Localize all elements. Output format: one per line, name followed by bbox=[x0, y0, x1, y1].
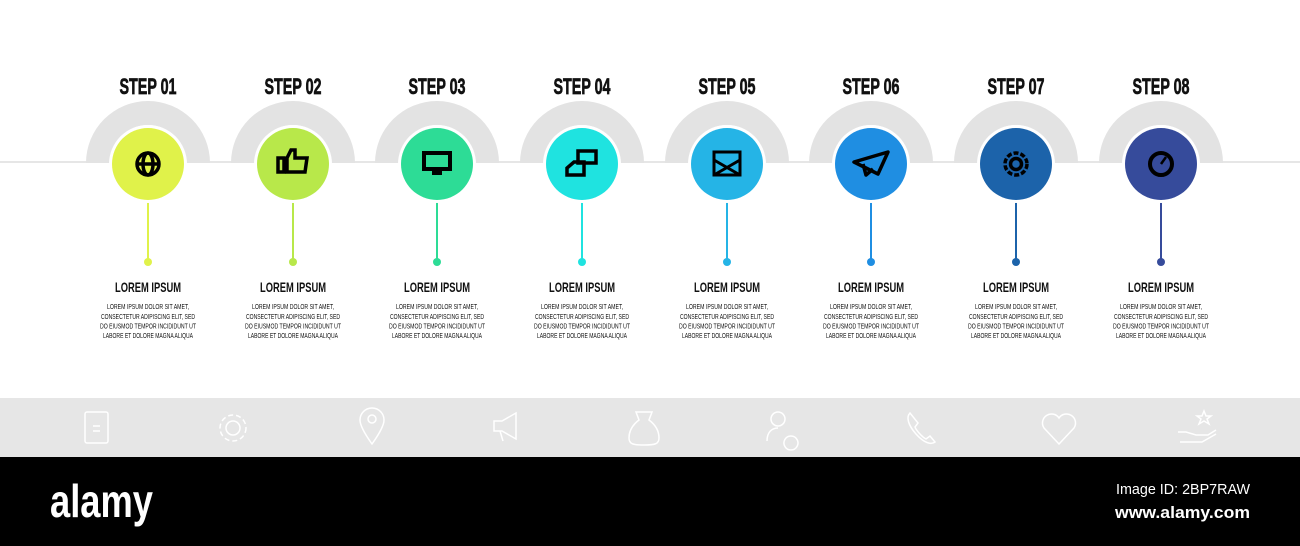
step 1 text: CONSECTETUR ADIPISCING ELIT, SED bbox=[101, 314, 195, 321]
step 3: CONSECTETUR ADIPISCING ELIT, SED bbox=[390, 314, 484, 321]
step 8: STEP 08 bbox=[1132, 74, 1190, 99]
step 8: LOREM IPSUM DOLOR SIT AMET, bbox=[1120, 304, 1202, 311]
icon: chat user bbox=[567, 151, 596, 175]
step 2: DO EIUSMOD TEMPOR INCIDIDUNT UT bbox=[245, 324, 342, 330]
step 2: LOREM IPSUM bbox=[260, 279, 326, 295]
step 7 bbox=[954, 74, 1078, 340]
step 5: STEP 05 bbox=[698, 74, 756, 99]
step 8: LABORE ET DOLORE MAGNA ALIQUA bbox=[1116, 333, 1206, 340]
step 5: LABORE ET DOLORE MAGNA ALIQUA bbox=[682, 333, 772, 340]
step 6 bbox=[809, 74, 933, 340]
logo: alamy bbox=[50, 475, 153, 527]
icon: gear bbox=[1005, 153, 1027, 175]
step 1 text: LOREM IPSUM DOLOR SIT AMET, bbox=[107, 304, 189, 311]
step 1 bbox=[86, 74, 210, 340]
step 6: LABORE ET DOLORE MAGNA ALIQUA bbox=[826, 333, 916, 340]
step 1 text bbox=[100, 279, 197, 340]
step 5: CONSECTETUR ADIPISCING ELIT, SED bbox=[680, 314, 774, 321]
step 1 heading: STEP 01 bbox=[120, 74, 176, 99]
step 4: STEP 04 bbox=[554, 74, 611, 99]
step 7: LOREM IPSUM DOLOR SIT AMET, bbox=[975, 304, 1057, 311]
step 3: LABORE ET DOLORE MAGNA ALIQUA bbox=[392, 333, 482, 340]
step 5: DO EIUSMOD TEMPOR INCIDIDUNT UT bbox=[679, 324, 776, 330]
footer bar bbox=[0, 457, 1300, 546]
step 5 bbox=[665, 74, 789, 340]
step 2: STEP 02 bbox=[264, 74, 322, 99]
step 2 bbox=[231, 74, 355, 340]
step 7: DO EIUSMOD TEMPOR INCIDIDUNT UT bbox=[968, 324, 1065, 330]
step 3: LOREM IPSUM bbox=[404, 279, 470, 295]
step 6: DO EIUSMOD TEMPOR INCIDIDUNT UT bbox=[823, 324, 920, 330]
step 1 text: LOREM IPSUM bbox=[115, 279, 181, 295]
step 8 bbox=[1099, 74, 1223, 340]
step 5: LOREM IPSUM DOLOR SIT AMET, bbox=[686, 304, 768, 311]
step 3: DO EIUSMOD TEMPOR INCIDIDUNT UT bbox=[389, 324, 486, 330]
step 8: LOREM IPSUM bbox=[1128, 279, 1194, 295]
step 4: LABORE ET DOLORE MAGNA ALIQUA bbox=[537, 333, 627, 340]
step 4 bbox=[520, 74, 644, 340]
step 7: LABORE ET DOLORE MAGNA ALIQUA bbox=[971, 333, 1061, 340]
step 3 bbox=[375, 74, 499, 340]
step 8: CONSECTETUR ADIPISCING ELIT, SED bbox=[1114, 314, 1208, 321]
step 6: LOREM IPSUM DOLOR SIT AMET, bbox=[830, 304, 912, 311]
step 7: LOREM IPSUM bbox=[983, 279, 1049, 295]
step 6: LOREM IPSUM bbox=[838, 279, 904, 295]
icon: globe bbox=[137, 153, 159, 175]
step 2: CONSECTETUR ADIPISCING ELIT, SED bbox=[246, 314, 340, 321]
step 3: LOREM IPSUM DOLOR SIT AMET, bbox=[396, 304, 478, 311]
step 2: LABORE ET DOLORE MAGNA ALIQUA bbox=[248, 333, 338, 340]
step 1 text: LABORE ET DOLORE MAGNA ALIQUA bbox=[103, 333, 193, 340]
step 7: CONSECTETUR ADIPISCING ELIT, SED bbox=[969, 314, 1063, 321]
step 2: LOREM IPSUM DOLOR SIT AMET, bbox=[252, 304, 334, 311]
step 6: CONSECTETUR ADIPISCING ELIT, SED bbox=[824, 314, 918, 321]
url: www.alamy.com bbox=[1114, 503, 1250, 522]
step 6: STEP 06 bbox=[842, 74, 900, 99]
step 4: LOREM IPSUM bbox=[549, 279, 615, 295]
icon: paper plane bbox=[854, 152, 888, 175]
step 8: DO EIUSMOD TEMPOR INCIDIDUNT UT bbox=[1113, 324, 1210, 330]
icon: clock bbox=[1150, 153, 1172, 175]
step 7: STEP 07 bbox=[988, 74, 1044, 99]
icon: monitor bbox=[422, 151, 452, 175]
step 1 text: DO EIUSMOD TEMPOR INCIDIDUNT UT bbox=[100, 324, 197, 330]
icon: thumbs up bbox=[278, 150, 307, 172]
step 3: STEP 03 bbox=[408, 74, 466, 99]
timeline line bbox=[0, 161, 1300, 163]
icon strip bbox=[0, 398, 1300, 457]
step 4: CONSECTETUR ADIPISCING ELIT, SED bbox=[535, 314, 629, 321]
icon: envelope bbox=[714, 152, 740, 175]
step 4: LOREM IPSUM DOLOR SIT AMET, bbox=[541, 304, 623, 311]
step 4: DO EIUSMOD TEMPOR INCIDIDUNT UT bbox=[534, 324, 631, 330]
step 5: LOREM IPSUM bbox=[694, 279, 760, 295]
image id: Image ID: 2BP7RAW bbox=[1116, 481, 1251, 498]
